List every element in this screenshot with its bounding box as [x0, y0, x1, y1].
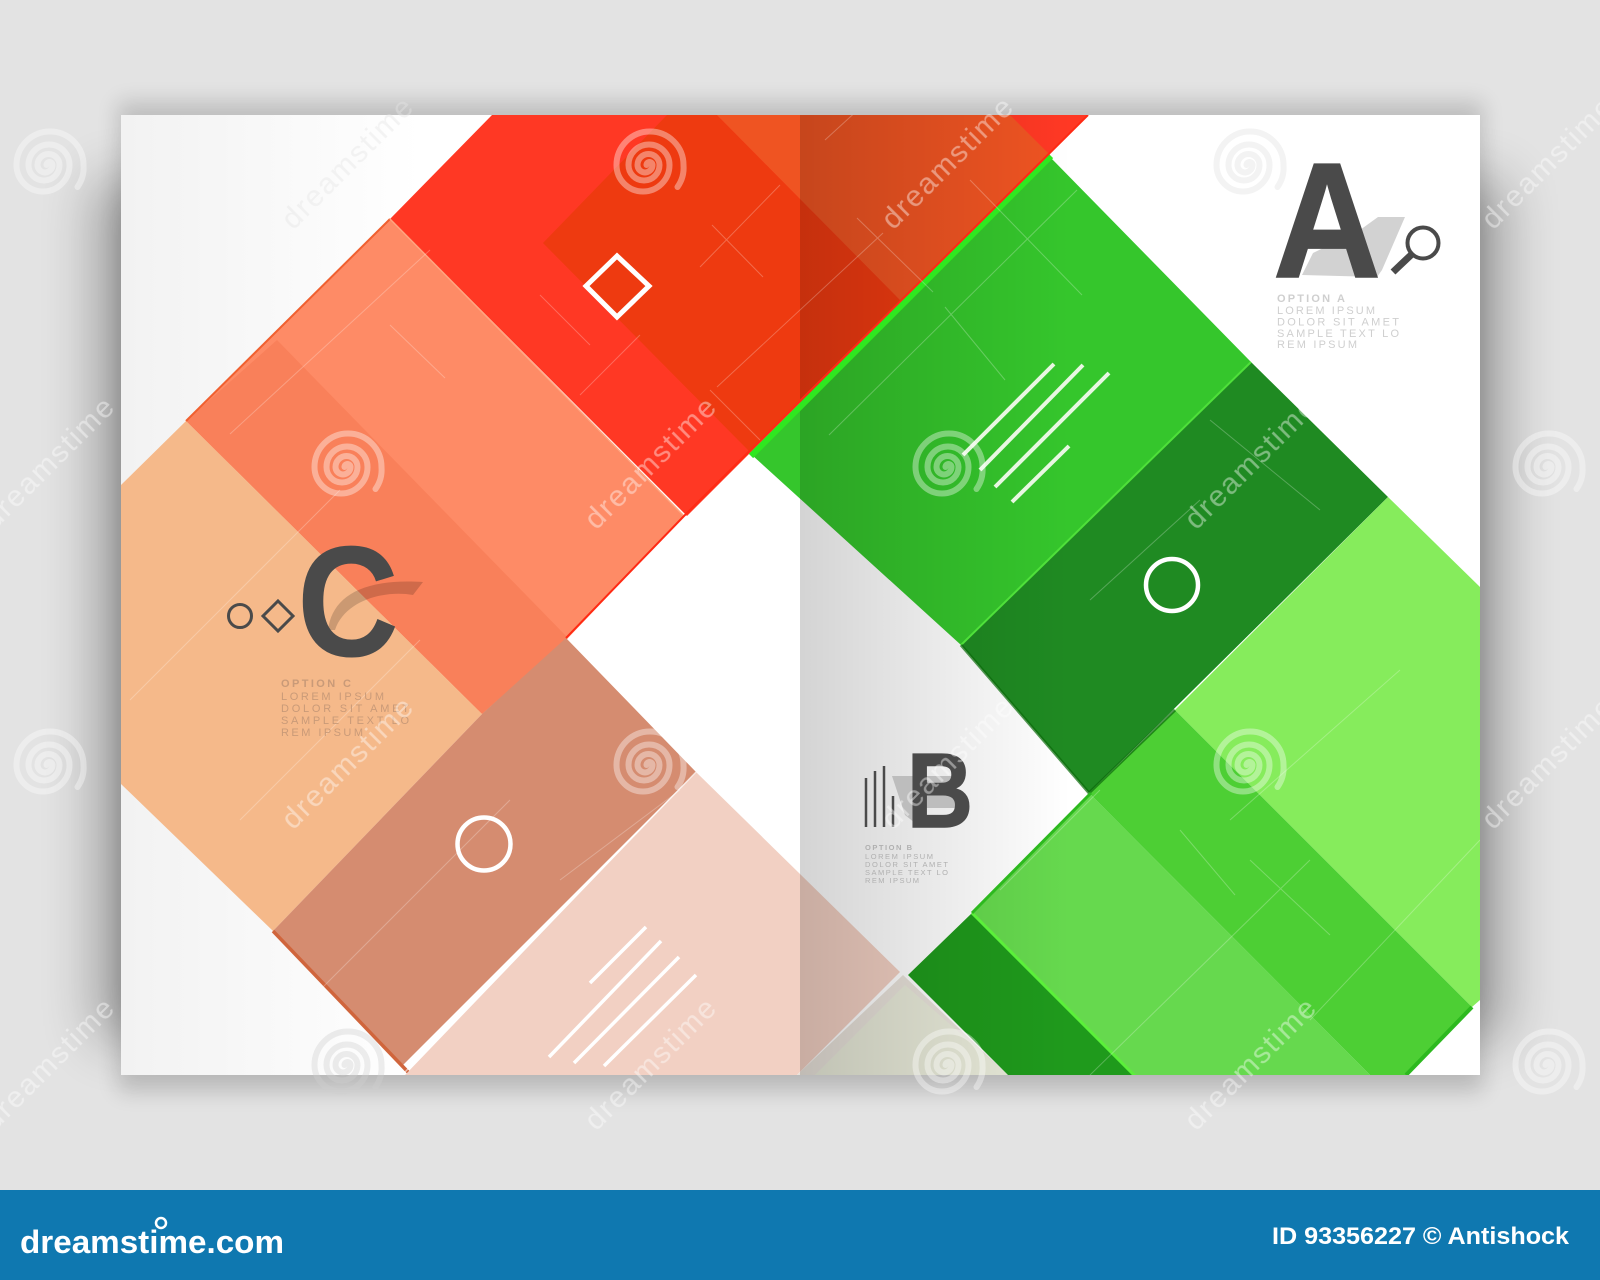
letter C: C	[297, 514, 399, 690]
watermark text: dreamstime	[578, 992, 723, 1137]
red square	[390, 115, 1088, 516]
option A text	[1277, 293, 1399, 351]
fold shadow	[800, 115, 1016, 1075]
page edge shadow	[118, 102, 1483, 1092]
page side shadow	[96, 180, 1505, 1040]
red edge	[566, 115, 1088, 638]
option A text: REM IPSUM	[1277, 339, 1357, 351]
dark green square	[961, 362, 1388, 793]
mid green band	[1089, 710, 1472, 1075]
lime bright edge	[972, 913, 1135, 1076]
dark red inner diamond	[543, 115, 900, 450]
option B block	[865, 732, 973, 885]
watermark spirals	[16, 132, 1583, 1092]
icon: text lines on pink	[549, 927, 696, 1066]
option B text: LOREM IPSUM	[865, 852, 933, 861]
option B text	[865, 843, 948, 885]
option A block	[1273, 129, 1438, 351]
panel: geometric squares	[121, 108, 1480, 1076]
dark green bottom square	[908, 913, 1133, 1075]
watermark cross lines	[130, 108, 1480, 1075]
option C text: REM IPSUM	[281, 727, 363, 739]
pale pink square	[405, 772, 900, 1075]
letter B shadow	[892, 776, 955, 823]
lime upper edge	[972, 793, 1091, 913]
salmon darker band	[186, 340, 568, 714]
watermark text: dreamstime	[875, 691, 1020, 836]
letter A: A	[1273, 129, 1381, 312]
option C text: LOREM IPSUM	[281, 691, 384, 703]
dark green shade edge	[961, 645, 1175, 793]
brown square	[273, 638, 696, 1066]
icon: white circle on green	[1146, 559, 1198, 611]
option C text	[281, 678, 409, 739]
watermark text: dreamstime	[875, 91, 1020, 236]
option C text: DOLOR SIT AMET	[281, 703, 409, 715]
footer bar	[0, 1190, 1600, 1280]
option C text: OPTION C	[281, 678, 351, 690]
light green edge	[961, 362, 1251, 645]
letter C shadow	[328, 581, 423, 630]
icon: white circle on brown	[458, 818, 510, 870]
option A text: OPTION A	[1277, 293, 1345, 305]
medium green square	[752, 157, 1251, 645]
watermark text: dreamstime	[578, 391, 723, 536]
letter B: B	[907, 732, 973, 850]
brochure page	[121, 115, 1480, 1075]
icon: circle	[228, 604, 252, 628]
watermark text: dreamstime	[1178, 391, 1323, 536]
option B text: REM IPSUM	[865, 876, 919, 885]
footer logo text: dreamstime.com	[20, 1224, 284, 1260]
letter A shadow	[1302, 217, 1405, 277]
salmon highlight edge	[390, 219, 684, 516]
salmon upper edge	[186, 219, 390, 421]
lower right dark edge	[1406, 1007, 1472, 1075]
icon: text lines on green	[963, 364, 1109, 502]
option C text: SAMPLE TEXT LO	[281, 715, 409, 727]
salmon square	[186, 219, 684, 714]
light green square	[1175, 497, 1480, 1007]
option C block	[228, 514, 423, 739]
pale olive triangle	[815, 985, 1008, 1075]
pale grey triangle	[797, 975, 1008, 1075]
watermark text: dreamstime	[275, 91, 420, 236]
watermark text: dreamstime	[1178, 992, 1323, 1137]
footer credit: ID 93356227 © Antishock	[1272, 1223, 1570, 1250]
peach square	[121, 421, 482, 931]
brown edge	[273, 931, 408, 1072]
bright green edge	[751, 156, 1051, 456]
icon: diamond	[263, 601, 293, 631]
option B text: SAMPLE TEXT LO	[865, 868, 948, 877]
option B text: DOLOR SIT AMET	[865, 860, 948, 869]
pale square highlight edge	[405, 772, 696, 1072]
option A text: LOREM IPSUM	[1277, 305, 1375, 317]
footer logo spiral	[156, 1218, 166, 1228]
watermark text: dreamstime	[275, 691, 420, 836]
icon: white diamond	[586, 256, 649, 317]
orange square	[717, 115, 1050, 300]
lime lower square	[972, 793, 1370, 1075]
icon: magnifier	[1393, 228, 1438, 272]
option B text: OPTION B	[865, 843, 913, 852]
option A text: DOLOR SIT AMET	[1277, 316, 1399, 328]
option A text: SAMPLE TEXT LO	[1277, 328, 1399, 340]
icon: bars	[866, 766, 893, 827]
